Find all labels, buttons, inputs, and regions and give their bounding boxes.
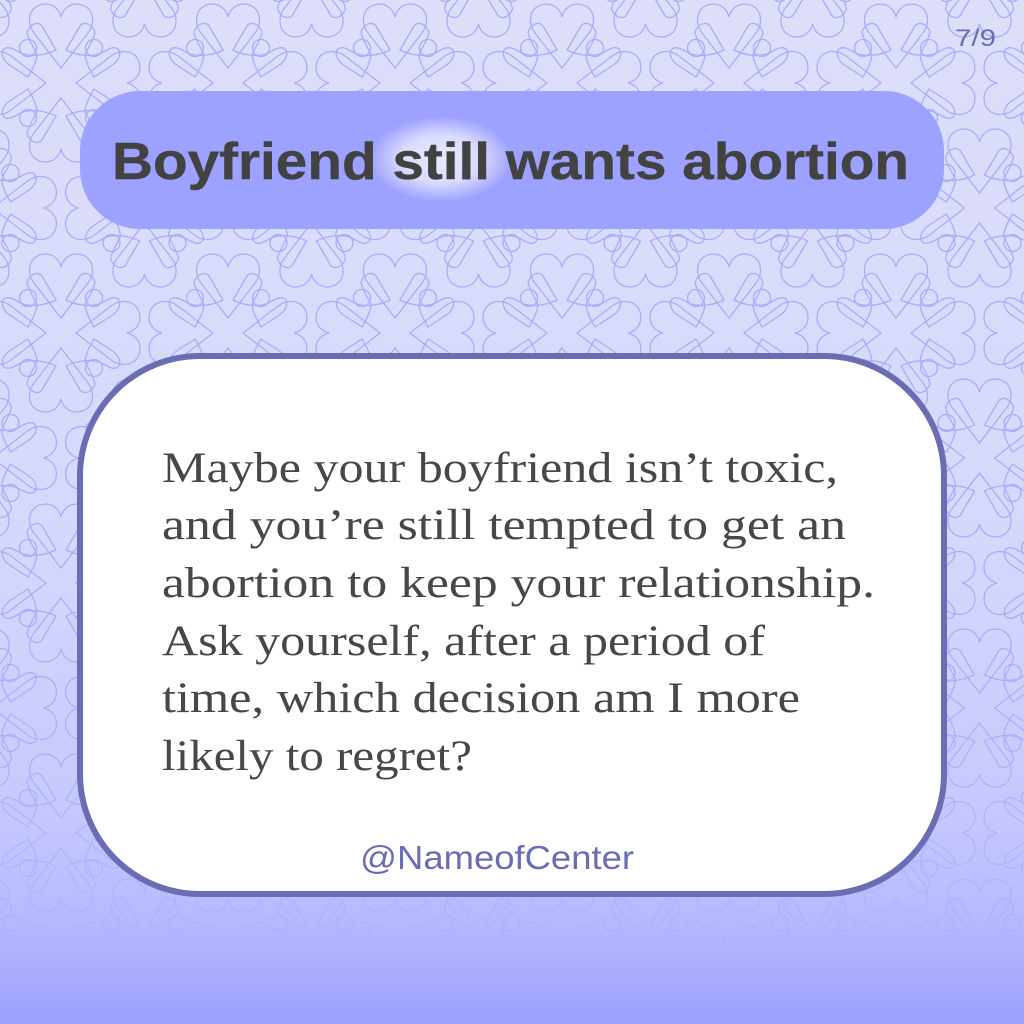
card outline bbox=[80, 356, 944, 894]
body text: time, which decision am I more bbox=[162, 675, 800, 722]
body text: and you’re still tempted to get an bbox=[162, 502, 846, 549]
body text: Maybe your boyfriend isn’t toxic, bbox=[162, 445, 838, 492]
body text: abortion to keep your relationship. bbox=[162, 560, 875, 607]
title: Boyfriend still wants abortion bbox=[112, 133, 909, 191]
message card bbox=[80, 356, 944, 894]
highlight glow behind word still bbox=[369, 116, 513, 202]
body text: Ask yourself, after a period of bbox=[162, 618, 766, 665]
body text bbox=[162, 445, 875, 780]
title banner bbox=[80, 91, 944, 229]
body text: likely to regret? bbox=[162, 733, 472, 780]
banner background bbox=[80, 91, 944, 229]
handle: @NameofCenter bbox=[360, 839, 634, 876]
page number: 7/9 bbox=[955, 25, 996, 52]
